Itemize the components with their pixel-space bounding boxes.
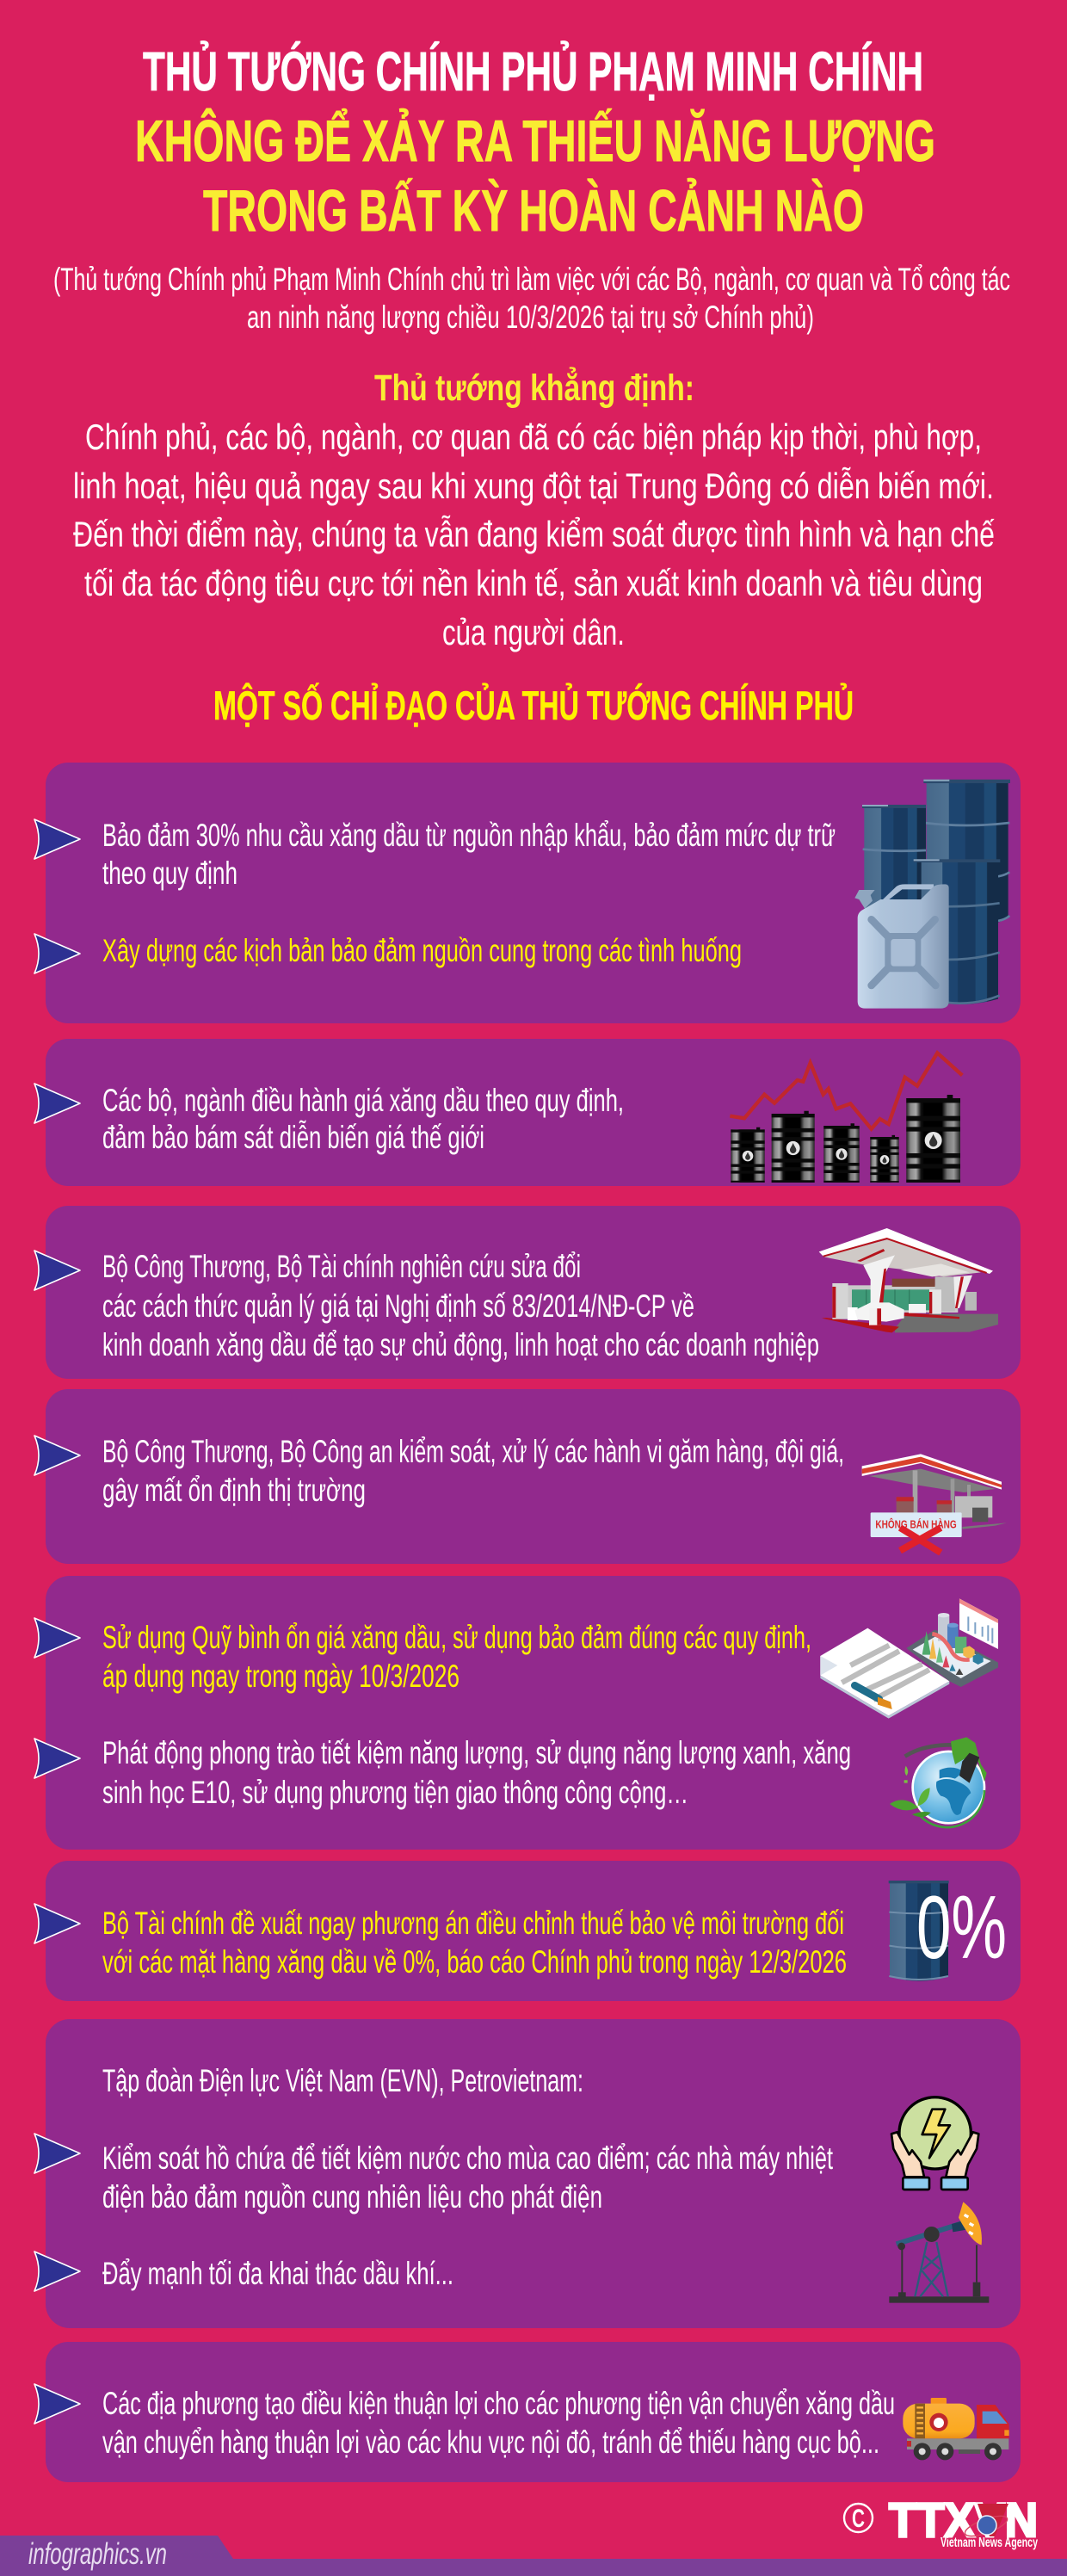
- icon: oil barrels and price line: [730, 1053, 962, 1183]
- title: [135, 40, 935, 244]
- panel: price management: [34, 1039, 1021, 1186]
- subtitle: an ninh năng lượng chiều 10/3/2026 tại trụ sở Chính phủ): [247, 300, 814, 335]
- text: price: [102, 1083, 624, 1155]
- panel: stabilisation fund and green energy: [34, 1576, 1021, 1850]
- lead paragraph: [73, 417, 995, 652]
- text: decree: các cách thức quản lý giá tại Nghị định số 83/2014/NĐ-CP về: [102, 1288, 694, 1324]
- icon: hands holding energy: [891, 2097, 978, 2190]
- arrow bullet: [34, 1251, 80, 1290]
- footer band: [0, 2536, 1067, 2576]
- lead paragraph: của người dân.: [442, 612, 625, 652]
- text: reserves: [102, 818, 836, 891]
- arrow bullet: [34, 1739, 80, 1778]
- text: reservoirs: điện bảo đảm nguồn cung nhiên liệu cho phát điện: [102, 2179, 602, 2215]
- text: stabilisation fund: áp dụng ngay trong ngày 10/3/2026: [102, 1659, 459, 1694]
- logo: TTXVN: C: [852, 2505, 865, 2533]
- icon: barrels and jerry can: [854, 780, 1010, 1009]
- icon: closed petrol station: KHÔNG BÁN HÀNG: [875, 1518, 957, 1531]
- arrow bullet: [34, 1436, 80, 1475]
- panel: environment tax: [34, 1861, 1021, 2001]
- text: EVN heading: Tập đoàn Điện lực Việt Nam (EVN), Petrovietnam:: [102, 2063, 583, 2098]
- subtitle: [53, 262, 1010, 335]
- arrow bullet: [34, 1904, 80, 1943]
- panel: market control: [34, 1389, 1021, 1564]
- text: transport: [102, 2386, 895, 2460]
- panel: logistics: [34, 2342, 1021, 2482]
- icon: fuel tanker truck: [903, 2398, 1009, 2460]
- arrow bullet: [34, 2384, 80, 2424]
- arrow bullet: [34, 934, 80, 973]
- text: decree: [102, 1249, 819, 1362]
- arrow bullet: [34, 1084, 80, 1123]
- logo: TTXVN: TTXVN: [889, 2493, 1038, 2547]
- text: green energy: [102, 1735, 851, 1810]
- logo: TTXVN: [844, 2493, 1038, 2550]
- text: decree: Bộ Công Thương, Bộ Tài chính nghiên cứu sửa đổi: [102, 1249, 581, 1284]
- icon: oil pump jack: [889, 2202, 989, 2303]
- arrow bullet: [34, 2134, 80, 2173]
- icon: barrel with zero percent: [889, 1878, 1007, 1981]
- text: price: đảm bảo bám sát diễn biến giá thế giới: [102, 1120, 484, 1155]
- arrow bullet: [34, 2252, 80, 2291]
- icon: petrol station: [819, 1228, 998, 1332]
- panel: supply: [34, 763, 1021, 1023]
- text: stabilisation fund: [102, 1620, 811, 1694]
- text: scenarios: Xây dựng các kịch bản bảo đảm nguồn cung trong các tình huống: [102, 933, 742, 968]
- text: hoarding: [102, 1434, 844, 1508]
- text: oil extraction: Đẩy mạnh tối đa khai thác dầu khí...: [102, 2256, 453, 2291]
- lead heading: Thủ tướng khẳng định:: [374, 366, 694, 409]
- icon: barrel with zero percent: 0%: [916, 1878, 1007, 1978]
- icon: document and tablet charts: [820, 1598, 998, 1719]
- arrow bullet: [34, 819, 80, 859]
- text: tax: [102, 1906, 847, 1980]
- panel: decree: [34, 1206, 1021, 1379]
- panel: EVN and Petrovietnam: [34, 2019, 1021, 2328]
- text: price: Các bộ, ngành điều hành giá xăng dầu theo quy định,: [102, 1083, 624, 1118]
- icon: closed petrol station: [862, 1454, 1007, 1553]
- text: reserves: theo quy định: [102, 856, 237, 891]
- footer site name: infographics.vn: [28, 2537, 167, 2571]
- text: green energy: sinh học E10, sử dụng phương tiện giao thông công cộng…: [102, 1775, 688, 1810]
- arrow bullet: [34, 1618, 80, 1658]
- icon: earth with green fuel nozzle: [890, 1737, 987, 1827]
- text: hoarding: gây mất ổn định thị trường: [102, 1473, 366, 1508]
- text: reservoirs: [102, 2140, 833, 2215]
